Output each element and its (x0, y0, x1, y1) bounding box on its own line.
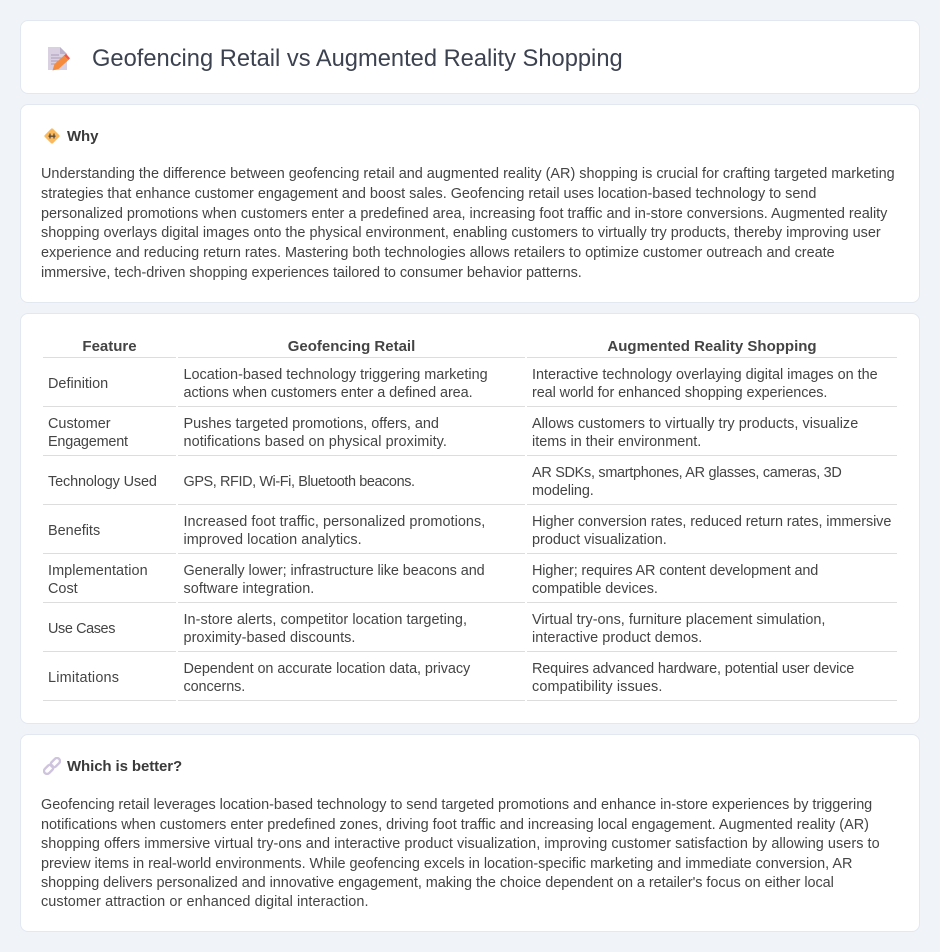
text: Technology Used (48, 474, 157, 490)
text: In-store alerts, competitor location targeting, (184, 612, 467, 628)
heading: which is better: Which is better? (67, 758, 182, 775)
text: notifications when customers enter predefined zones, driving foot traffic and increasing local engagement. Augmented reality (AR) (41, 817, 869, 833)
text: Feature (82, 338, 137, 355)
panel: comparison table (20, 313, 920, 724)
text: Augmented Reality Shopping (607, 338, 817, 355)
panel: why (20, 104, 920, 303)
text: items in their environment. (532, 434, 701, 450)
text: Higher conversion rates, reduced return rates, immersive (532, 514, 891, 530)
text: improved location analytics. (184, 532, 362, 548)
text: Limitations (48, 670, 119, 686)
icon: document with pencil (48, 47, 70, 70)
row: technology used (48, 465, 842, 499)
text: AR SDKs, smartphones, AR glasses, cameras, 3D (532, 465, 842, 481)
text: Virtual try-ons, furniture placement simulation, (532, 612, 825, 628)
row: use cases (48, 612, 825, 646)
text: why paragraph (41, 166, 895, 281)
text: Allows customers to virtually try products, visualize (532, 416, 858, 432)
row: benefits (48, 514, 891, 548)
text: Higher; requires AR content development and (532, 563, 818, 579)
panel: which is better (20, 734, 920, 932)
text: product visualization. (532, 532, 667, 548)
text: actions when customers enter a defined area. (184, 385, 473, 401)
icon: warning diamond (44, 128, 60, 144)
text: Cost (48, 581, 78, 597)
text: concerns. (184, 679, 245, 695)
text: immersive, tech-driven shopping experiences tailored to consumer behavior patterns. (41, 265, 582, 281)
text: Use Cases (48, 621, 115, 637)
icon: link (43, 757, 61, 775)
text: Pushes targeted promotions, offers, and (184, 416, 439, 432)
text: compatibility issues. (532, 679, 662, 695)
text: Implementation (48, 563, 148, 579)
row: customer engagement (48, 416, 858, 450)
text: software integration. (184, 581, 314, 597)
text: Engagement (48, 434, 128, 450)
text: interactive product demos. (532, 630, 702, 646)
panel: title (20, 20, 920, 94)
row: implementation cost (48, 563, 818, 597)
text: personalized promotions when customers enter a predefined area, increasing foot traffic and in-store conversions. Augmented reality (41, 206, 887, 222)
text: Dependent on accurate location data, privacy (184, 661, 470, 677)
text: strategies that enhance customer engagement and boost sales. Geofencing retail uses location-based technology to send (41, 186, 816, 202)
text: Generally lower; infrastructure like beacons and (184, 563, 485, 579)
text: shopping overlays digital images onto the physical environment, enabling customers to virtually try products, thereby improving user (41, 225, 881, 241)
text: Geofencing Retail (288, 338, 415, 355)
text: Geofencing retail leverages location-based technology to send targeted promotions and enhance in-store experiences by triggering (41, 797, 872, 813)
text: modeling. (532, 483, 594, 499)
text: real world for enhanced shopping experiences. (532, 385, 827, 401)
heading: why: Why (67, 128, 98, 145)
text: Understanding the difference between geofencing retail and augmented reality (AR) shopping is crucial for crafting targeted marketing (41, 166, 895, 182)
table header (82, 338, 817, 355)
row: definition (48, 367, 878, 401)
text: experience and reducing return rates. Mastering both technologies allows retailers to optimize customer outreach and create (41, 245, 835, 261)
text: customer attraction or enhanced digital interaction. (41, 894, 369, 910)
text: Benefits (48, 523, 100, 539)
row: limitations (48, 661, 854, 695)
text: Increased foot traffic, personalized promotions, (184, 514, 485, 530)
text: Location-based technology triggering marketing (184, 367, 488, 383)
text: preview items in real-world environments. While geofencing excels in location-specific marketing and immediate conversion, AR (41, 856, 852, 872)
text: Requires advanced hardware, potential user device (532, 661, 854, 677)
title: Geofencing Retail vs Augmented Reality Shopping (92, 46, 623, 72)
text: which is better paragraph (41, 797, 880, 910)
text: Customer (48, 416, 111, 432)
text: shopping delivers personalized and innovative engagement, making the choice dependent on a retailer's focus on either local (41, 875, 834, 891)
text: Definition (48, 376, 108, 392)
text: Interactive technology overlaying digital images on the (532, 367, 878, 383)
text: proximity-based discounts. (184, 630, 355, 646)
text: shopping offers immersive virtual try-ons and interactive product visualization, improving customer satisfaction by allowing users to (41, 836, 880, 852)
text: GPS, RFID, Wi-Fi, Bluetooth beacons. (184, 474, 415, 490)
text: compatible devices. (532, 581, 658, 597)
text: notifications based on physical proximity. (184, 434, 447, 450)
